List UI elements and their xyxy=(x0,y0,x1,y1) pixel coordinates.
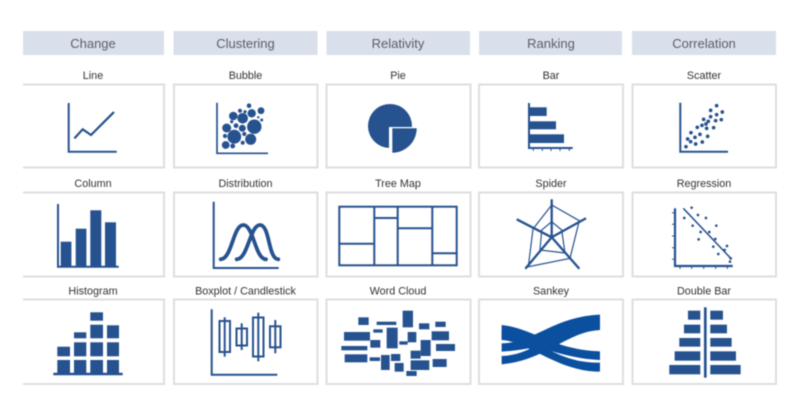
panel: Histogram: Histogram xyxy=(68,286,118,298)
icon: bar chart xyxy=(529,103,573,151)
panel: Line: Line xyxy=(83,70,103,82)
panel: Double Bar xyxy=(632,286,776,384)
header: Correlation: Correlation xyxy=(672,36,736,51)
header: Change: Change xyxy=(70,36,116,51)
panel: Pie xyxy=(326,70,470,168)
icon: scatter chart xyxy=(680,103,728,152)
panel: Scatter: Scatter xyxy=(687,70,721,82)
icon: column chart xyxy=(58,204,119,267)
panel: Pie: Pie xyxy=(390,70,406,82)
panel: Bar: Bar xyxy=(543,70,560,82)
icon: spider chart xyxy=(517,199,586,269)
icon: pie chart xyxy=(368,104,419,155)
header: Ranking: Ranking xyxy=(527,36,575,51)
header: Relativity: Relativity xyxy=(372,36,425,51)
panel: Tree Map: Tree Map xyxy=(375,178,421,190)
panel: Regression xyxy=(632,178,776,276)
panel: Sankey: Sankey xyxy=(533,286,570,298)
panel: Line xyxy=(23,70,164,168)
panel: Bubble xyxy=(174,70,318,168)
panel: Bubble: Bubble xyxy=(229,70,262,82)
panel: Boxplot / Candlestick: Boxplot / Candlestick xyxy=(195,286,297,298)
icon: line chart xyxy=(69,103,117,152)
header: Clustering: Clustering xyxy=(216,36,275,51)
panel: Bar xyxy=(479,70,623,168)
icon: double bar chart xyxy=(669,307,741,378)
panel: Sankey xyxy=(479,286,623,384)
icon: histogram xyxy=(53,312,123,374)
panel: Boxplot / Candlestick xyxy=(174,286,318,384)
panel: Word Cloud: Word Cloud xyxy=(370,286,426,298)
icon: tree map xyxy=(339,207,457,265)
panel: Tree Map xyxy=(326,178,470,276)
header: Ranking xyxy=(479,31,622,55)
icon: bubble chart xyxy=(217,103,268,153)
panel: Spider xyxy=(479,178,623,276)
icon: word cloud blocks xyxy=(341,311,455,376)
header: Relativity xyxy=(326,31,470,55)
panel: Distribution: Distribution xyxy=(218,178,273,190)
header: Change xyxy=(23,31,164,55)
panel: Distribution xyxy=(174,178,318,276)
header: Clustering xyxy=(174,31,318,55)
icon: distribution curves xyxy=(214,202,279,268)
icon: candlestick chart xyxy=(212,309,280,375)
panel: Double Bar: Double Bar xyxy=(677,286,731,298)
panel: Spider: Spider xyxy=(535,178,567,190)
icon: regression chart xyxy=(672,206,733,269)
panel: Column: Column xyxy=(74,178,112,190)
panel: Histogram xyxy=(23,286,164,384)
icon: sankey diagram xyxy=(502,315,600,372)
header: Correlation xyxy=(632,31,776,55)
panel: Column xyxy=(23,178,164,276)
panel: Regression: Regression xyxy=(677,178,731,190)
panel: Scatter xyxy=(632,70,776,168)
panel: Word Cloud xyxy=(326,286,470,384)
